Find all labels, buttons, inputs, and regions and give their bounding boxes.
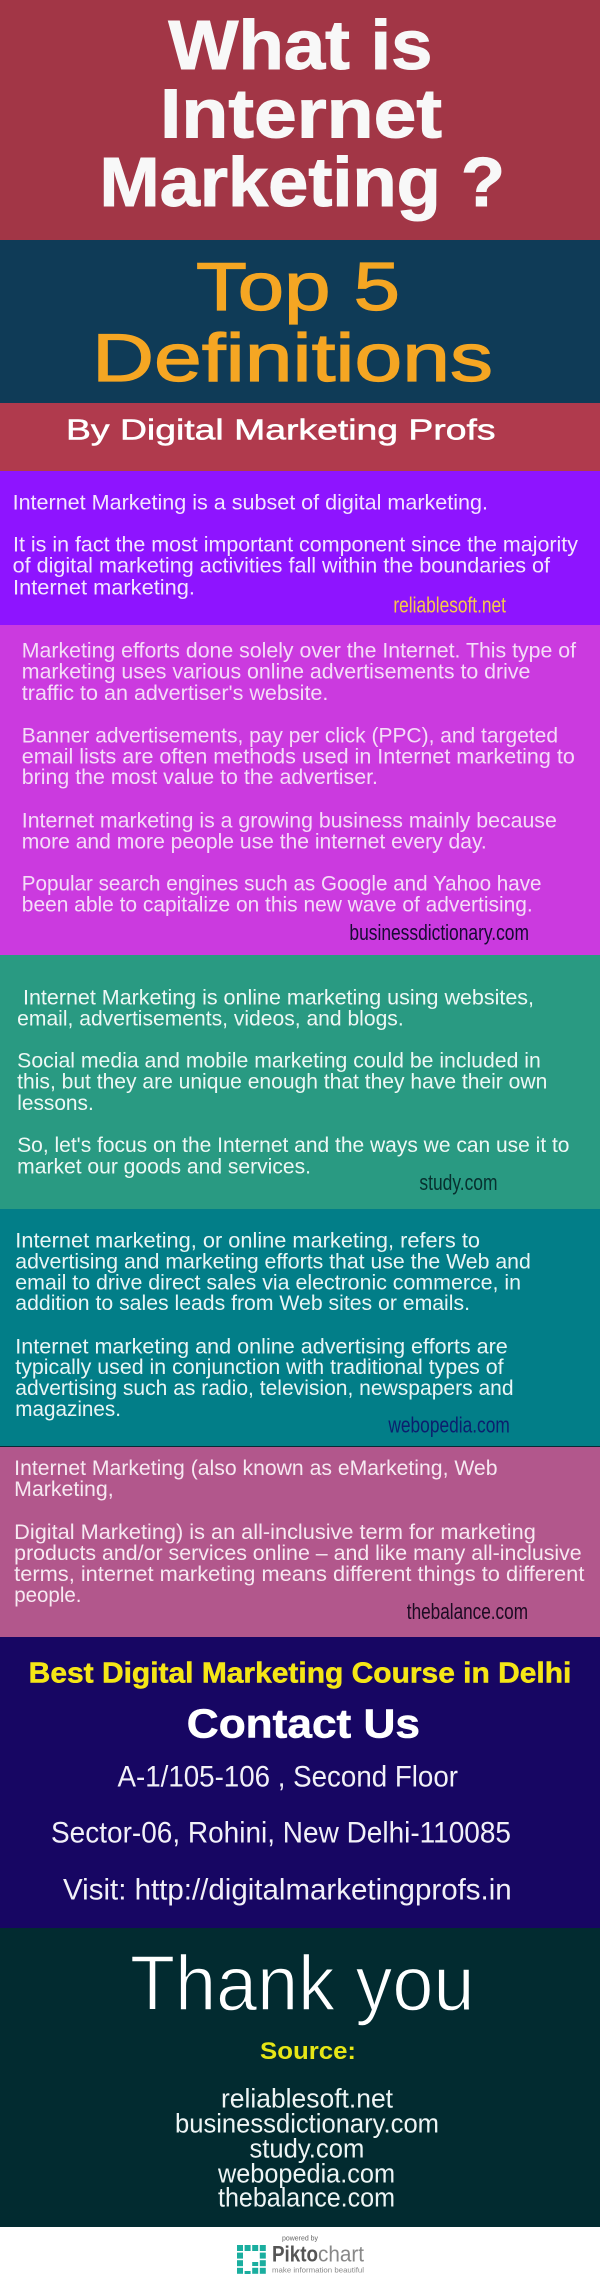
address line 1: A-1/105-106 , Second Floor xyxy=(118,1761,458,1794)
definition 4 text: addition to sales leads from Web sites or emails. xyxy=(15,1292,470,1315)
definition 2 text: Banner advertisements, pay per click (PPC), and targeted xyxy=(22,724,558,747)
definition 5 text xyxy=(14,1457,585,1607)
byline text: By Digital Marketing Profs xyxy=(66,414,496,446)
powered by text: powered by xyxy=(282,2234,318,2243)
address line 2: Sector-06, Rohini, New Delhi-110085 xyxy=(51,1817,511,1850)
source list xyxy=(175,2084,439,2213)
definition 2 text: more and more people use the internet every day. xyxy=(22,830,487,853)
definition 3 text: Social media and mobile marketing could be included in xyxy=(17,1049,541,1072)
definition 3 text xyxy=(17,986,569,1178)
definition 2 text: Internet marketing is a growing business mainly because xyxy=(22,809,557,832)
definition 4 text: Internet marketing and online advertising efforts are xyxy=(15,1335,508,1358)
definition 3 text: lessons. xyxy=(17,1092,94,1115)
panel: definition 3 study xyxy=(0,955,600,1209)
panel: byline xyxy=(0,403,600,471)
tagline: make information beautiful xyxy=(272,2266,364,2275)
definition 1 text: Internet marketing. xyxy=(13,576,195,599)
panel: piktochart footer xyxy=(0,2227,600,2283)
title line: Marketing ?: Marketing ? xyxy=(100,143,505,221)
source: reliablesoft.net: reliablesoft.net xyxy=(393,593,506,618)
source list: webopedia.com xyxy=(217,2158,395,2188)
definition 4 text: typically used in conjunction with traditional types of xyxy=(15,1356,504,1379)
definition 4 text: advertising and marketing efforts that use the Web and xyxy=(15,1250,531,1273)
icon: piktochart logo xyxy=(237,2245,266,2274)
definition 4 text xyxy=(15,1229,531,1421)
definition 3 text: market our goods and services. xyxy=(17,1155,311,1178)
definition 4 text: magazines. xyxy=(15,1398,121,1421)
definition 2 text: been able to capitalize on this new wave of advertising. xyxy=(22,894,533,917)
piktochart wordmark xyxy=(272,2242,364,2267)
panel: definition 2 businessdictionary xyxy=(0,625,600,955)
title line: What is: What is xyxy=(168,6,432,84)
definition 5 text: terms, internet marketing means different things to different xyxy=(14,1563,585,1586)
definition 3 text: this, but they are unique enough that they have their own xyxy=(17,1070,547,1093)
definition 4 text: Internet marketing, or online marketing, refers to xyxy=(15,1229,480,1252)
definition 5 text: Digital Marketing) is an all-inclusive term for marketing xyxy=(14,1521,536,1544)
definition 2 text xyxy=(22,639,576,917)
definition 5 text: Marketing, xyxy=(14,1478,114,1501)
heading: Top 5: Top 5 xyxy=(196,249,400,325)
piktochart wordmark: Pikto xyxy=(272,2242,318,2267)
definition 3 text: So, let's focus on the Internet and the ways we can use it to xyxy=(17,1134,569,1157)
definition 1 text: of digital marketing activities fall within the boundaries of xyxy=(13,555,550,578)
source: webopedia.com: webopedia.com xyxy=(388,1413,510,1438)
title line: Internet: Internet xyxy=(160,74,442,152)
definition 2 text: email lists are often methods used in Internet marketing to xyxy=(22,745,575,768)
course heading: Best Digital Marketing Course in Delhi xyxy=(29,1658,571,1690)
website line: Visit: http://digitalmarketingprofs.in xyxy=(63,1873,512,1906)
source: study.com: study.com xyxy=(419,1170,498,1195)
source list: reliablesoft.net xyxy=(221,2084,393,2114)
panel: definition 1 reliablesoft xyxy=(0,471,600,625)
definition 2 text: marketing uses various online advertisements to drive xyxy=(22,660,530,683)
definition 2 text: Popular search engines such as Google and Yahoo have xyxy=(22,872,542,895)
definition 2 text: Marketing efforts done solely over the Internet. This type of xyxy=(22,639,576,662)
definition 4 text: email to drive direct sales via electronic commerce, in xyxy=(15,1271,521,1294)
definition 2 text: traffic to an advertiser's website. xyxy=(22,682,328,705)
heading: Definitions: Definitions xyxy=(92,320,493,396)
definition 3 text: Internet Marketing is online marketing using websites, xyxy=(23,986,534,1009)
definition 1 text: Internet Marketing is a subset of digital marketing. xyxy=(13,491,488,514)
definition 2 text: bring the most value to the advertiser. xyxy=(22,766,378,789)
source: businessdictionary.com: businessdictionary.com xyxy=(349,920,529,945)
thank you heading: Thank you xyxy=(130,1939,474,2027)
panel: main title xyxy=(0,0,600,240)
definition 1 text xyxy=(13,491,578,599)
source list: thebalance.com xyxy=(218,2183,395,2213)
source list: businessdictionary.com xyxy=(175,2109,439,2139)
panel: definition 4 webopedia xyxy=(0,1209,600,1447)
panel: thank you and sources xyxy=(0,1928,600,2227)
contact heading: Contact Us xyxy=(187,1700,420,1746)
piktochart wordmark: chart xyxy=(318,2242,364,2267)
panel: contact xyxy=(0,1637,600,1928)
source: thebalance.com: thebalance.com xyxy=(407,1599,528,1624)
source list: study.com xyxy=(250,2134,364,2164)
definition 5 text: products and/or services online – and like many all-inclusive xyxy=(14,1542,582,1565)
definition 4 text: advertising such as radio, television, newspapers and xyxy=(15,1377,514,1400)
panel: top 5 definitions xyxy=(0,240,600,403)
panel: definition 5 thebalance xyxy=(0,1447,600,1637)
definition 5 text: people. xyxy=(14,1584,82,1607)
definition 3 text: email, advertisements, videos, and blogs. xyxy=(17,1007,404,1030)
definition 5 text: Internet Marketing (also known as eMarketing, Web xyxy=(14,1457,497,1480)
source heading: Source: xyxy=(260,2038,356,2065)
definition 1 text: It is in fact the most important component since the majority xyxy=(13,534,578,557)
